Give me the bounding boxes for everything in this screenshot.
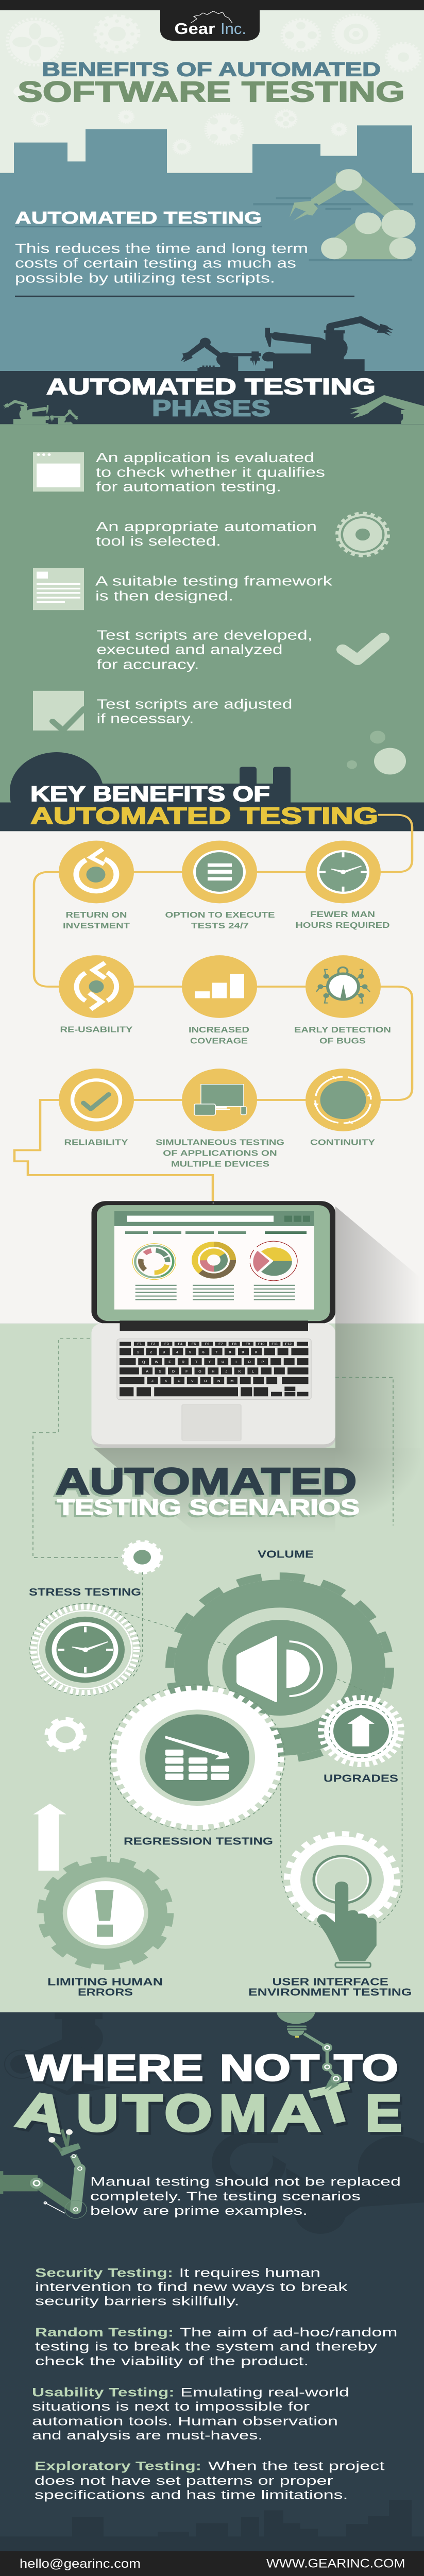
label: CONTINUITY <box>310 1138 375 1147</box>
keyboard keys: 9 <box>242 1351 244 1354</box>
phase 5 text: Test scripts are adjusted <box>97 697 293 712</box>
keyboard keys: F7 <box>218 1343 223 1346</box>
label: TESTS 24/7 <box>191 921 249 930</box>
keyboard keys: L <box>252 1370 255 1374</box>
intro paragraph: possible by utilizing test scripts. <box>15 271 275 286</box>
label: SIMULTANEOUS TESTING <box>156 1138 284 1147</box>
robot arm lower left <box>0 2129 87 2218</box>
keyboard keys: M <box>230 1380 234 1383</box>
keyboard keys: 6 <box>202 1351 205 1354</box>
phase 1 text: An application is evaluated <box>96 450 314 465</box>
heading: phases: AUTOMATED TESTING <box>46 375 376 399</box>
scenario: regression gear <box>110 1685 285 1831</box>
laptop screen <box>114 1211 314 1310</box>
scenario: user interface gear <box>287 1834 397 1968</box>
keyboard keys: R <box>182 1361 184 1364</box>
clock hands <box>58 1627 113 1673</box>
phase 4 text <box>97 628 313 672</box>
speaker icon <box>236 1636 323 1702</box>
scenario labels bottom: USER INTERFACE <box>273 1976 388 1988</box>
phases panel background <box>0 424 424 803</box>
heading: testing scenarios: TESTING SCENARIOS <box>57 1495 360 1519</box>
label: HOURS REQUIRED <box>296 920 390 929</box>
title <box>18 58 405 108</box>
screen chart 3 <box>240 1233 307 1289</box>
intro paragraph: This reduces the time and long term <box>15 241 308 256</box>
heading: automate: A <box>274 2087 324 2145</box>
bottom skyline <box>0 2500 424 2551</box>
item: usability testing: automation tools. Human observation <box>32 2414 338 2428</box>
light robot arm illustration <box>253 169 416 261</box>
phase 5 text <box>97 697 293 726</box>
intro text: Manual testing should not be replaced <box>90 2175 401 2189</box>
small green robot left <box>3 400 78 424</box>
label: FEWER MAN <box>310 910 375 919</box>
keyboard keys: F2 <box>151 1343 156 1346</box>
keyboard keys: 2 <box>150 1351 152 1354</box>
heading: phases: PHASES <box>152 396 270 421</box>
scenario labels bottom: ERRORS <box>78 1986 133 1998</box>
regression label: REGRESSION TESTING <box>124 1835 273 1847</box>
intro text: below are prime examples. <box>90 2204 308 2218</box>
screen chart 1 <box>128 1240 180 1283</box>
label: OF BUGS <box>319 1036 366 1045</box>
heading: where not to: WHERE <box>28 2049 206 2091</box>
dashed scenario connectors <box>30 1572 402 1928</box>
benefit: reliability <box>59 1069 134 1147</box>
item: exploratory testing: Exploratory Testing: <box>35 2459 201 2473</box>
heading: automate: T <box>125 2087 165 2145</box>
phase 2 text: An appropriate automation <box>96 519 317 534</box>
item: security testing: Security Testing: <box>35 2266 173 2280</box>
heading: where not to: NOT <box>219 2047 319 2089</box>
keyboard keys: F10 <box>258 1343 265 1346</box>
heading: automate: T <box>306 2072 362 2137</box>
item: usability testing <box>32 2385 349 2442</box>
item: random testing: The aim of ad-hoc/random <box>180 2325 398 2339</box>
keyboard keys: O <box>248 1361 251 1364</box>
scenario labels top: VOLUME <box>258 1548 314 1560</box>
keyboard keys: 1 <box>137 1351 139 1354</box>
keyboard keys: U <box>222 1361 224 1364</box>
keyboard keys: W <box>155 1361 159 1364</box>
heading: where not to: TO <box>334 2047 398 2089</box>
item: usability testing: Usability Testing: <box>32 2385 174 2399</box>
label <box>156 1138 284 1168</box>
heading: testing scenarios: TESTING SCENARIOS <box>55 1497 358 1521</box>
heading: automate: A <box>271 2084 321 2142</box>
heading: automate: U <box>79 2087 121 2145</box>
heading: automate: U <box>76 2084 118 2142</box>
label <box>165 910 275 930</box>
item: exploratory testing: does not have set patterns or proper <box>35 2473 333 2487</box>
logo tab: Inc. <box>221 20 246 38</box>
where not to automate panel <box>0 2012 424 2551</box>
heading: phases <box>46 375 376 421</box>
benefit: fewer man hours <box>296 841 390 929</box>
label: RETURN ON <box>66 910 127 919</box>
keyboard keys: E <box>168 1361 171 1364</box>
item: random testing: check the viability of the product. <box>35 2354 309 2368</box>
keyboard keys: H <box>212 1370 214 1374</box>
keyboard keys: P <box>261 1361 264 1364</box>
heading: key benefits: AUTOMATED TESTING <box>30 803 378 829</box>
item: security testing: security barriers skillfully. <box>35 2294 239 2308</box>
heading: testing scenarios: AUTOMATED <box>53 1463 354 1504</box>
keyboard keys: A <box>146 1370 148 1374</box>
screen chart 2 <box>195 1244 233 1276</box>
heading: automate: M <box>219 2084 267 2142</box>
phase 1 text <box>96 450 325 495</box>
heading: where not to <box>26 2047 400 2091</box>
background gears <box>7 14 420 154</box>
benefit: early detection of bugs <box>294 955 391 1045</box>
exclamation mark <box>95 1890 113 1937</box>
label: RE-USABILITY <box>60 1025 133 1034</box>
keyboard keys <box>120 1342 308 1396</box>
keyboard keys: F3 <box>164 1343 169 1346</box>
heading: automate: A <box>11 2079 72 2144</box>
heading: testing scenarios: AUTOMATED <box>56 1461 357 1502</box>
phase 1 text: to check whether it qualifies <box>96 465 325 480</box>
footer <box>0 2551 424 2576</box>
phase 4 text: Test scripts are developed, <box>97 628 313 643</box>
heading: automate: O <box>164 2084 212 2142</box>
label <box>189 1025 249 1045</box>
intro paragraph: costs of certain testing as much as <box>15 256 296 271</box>
logo wordmark: Gear <box>175 20 215 38</box>
robot arm upper right <box>277 2012 342 2091</box>
keyboard keys: F11 <box>272 1343 278 1346</box>
intro paragraph <box>15 241 308 286</box>
phase 2 text <box>96 519 317 549</box>
phase 4 icon: check <box>343 638 383 660</box>
keyboard keys: D <box>172 1370 175 1374</box>
heading: automate <box>11 2072 404 2147</box>
heading: where not to: TO <box>336 2049 400 2091</box>
keyboard keys: 8 <box>229 1351 231 1354</box>
keyboard keys: 5 <box>189 1351 191 1354</box>
intro text <box>90 2175 401 2218</box>
top bar <box>0 0 424 10</box>
teal section with city skyline <box>0 125 424 371</box>
dashed connectors from laptop <box>33 1338 393 1557</box>
footer website: WWW.GEARINC.COM <box>266 2556 405 2570</box>
upgrades label: UPGRADES <box>324 1773 398 1784</box>
keyboard keys: F8 <box>232 1343 236 1346</box>
bubbles <box>347 731 406 774</box>
phase 3 icon: document <box>33 568 84 610</box>
item: random testing <box>35 2325 398 2368</box>
yellow connector line <box>14 815 412 1202</box>
label: MULTIPLE DEVICES <box>171 1159 269 1168</box>
keyboard keys: 7 <box>215 1351 217 1354</box>
dark robot silhouette <box>181 316 394 371</box>
label: OF APPLICATIONS ON <box>163 1148 277 1158</box>
phase 5 text: if necessary. <box>97 711 194 726</box>
laptop long shadow <box>93 1207 424 1546</box>
footer email: hello@gearinc.com <box>20 2556 141 2571</box>
benefits panel background <box>0 831 424 1324</box>
item: exploratory testing: When the test project <box>208 2459 385 2473</box>
label: OPTION TO EXECUTE <box>165 910 275 919</box>
heading: automate: T <box>123 2084 162 2142</box>
keyboard keys: S <box>159 1370 162 1374</box>
keyboard keys: V <box>191 1380 194 1383</box>
item: exploratory testing: specifications and has time limitations. <box>35 2488 348 2502</box>
scenario labels bottom: LIMITING HUMAN <box>47 1976 163 1988</box>
heading: key benefits: KEY BENEFITS OF <box>30 782 270 806</box>
keyboard keys: F1 <box>138 1343 142 1346</box>
large white arrow <box>33 1804 66 1871</box>
phase 5 icon: checkbox <box>33 691 84 731</box>
laptop lid <box>92 1201 335 1324</box>
scenario: stress gear <box>33 1607 137 1692</box>
laptop base <box>92 1320 335 1448</box>
label <box>294 1025 391 1045</box>
laptop <box>92 1201 335 1448</box>
keyboard keys: F <box>185 1370 188 1374</box>
keyboard keys: F5 <box>192 1343 196 1346</box>
item: usability testing: Emulating real-world <box>180 2385 349 2399</box>
heading: where not to: NOT <box>222 2049 321 2091</box>
keyboard keys: Z <box>151 1380 154 1383</box>
keyboard keys: 3 <box>163 1351 165 1354</box>
heading: automate: M <box>222 2087 269 2145</box>
phase 1 text: for automation testing. <box>96 480 281 495</box>
heading: automate: E <box>368 2087 404 2145</box>
label: INCREASED <box>189 1025 249 1035</box>
heading: automate: O <box>167 2087 215 2145</box>
item: usability testing: situations is next to impossible for <box>32 2399 310 2414</box>
logo tab <box>160 10 260 41</box>
scenarios panel background <box>0 1324 424 2012</box>
title: BENEFITS OF AUTOMATED <box>42 58 381 80</box>
benefit: simultaneous testing <box>156 1069 284 1168</box>
small white gear <box>46 1719 84 1751</box>
phase 4 text: executed and analyzed <box>97 642 283 657</box>
item: security testing: intervention to find new ways to break <box>35 2280 348 2294</box>
scenario labels bottom <box>47 1976 412 1998</box>
heading: automate: A <box>14 2082 75 2147</box>
benefit: return on investment <box>59 841 134 930</box>
item: random testing: testing is to break the system and thereby <box>35 2340 378 2353</box>
screen text lines <box>135 1285 295 1300</box>
title: SOFTWARE TESTING <box>18 76 405 108</box>
scenario: volume gear <box>170 1576 389 1759</box>
phase 3 text: is then designed. <box>95 589 233 604</box>
scenario labels top <box>29 1548 314 1598</box>
heading: testing scenarios <box>53 1461 360 1521</box>
phase 3 text <box>95 574 333 604</box>
keyboard keys: N <box>217 1380 220 1383</box>
phase 1 icon: window <box>33 452 84 492</box>
keyboard keys: T <box>195 1361 198 1364</box>
keyboard keys: X <box>164 1380 167 1383</box>
keyboard keys: F4 <box>178 1343 182 1346</box>
keyboard keys: C <box>178 1380 180 1383</box>
keyboard keys: K <box>238 1370 241 1374</box>
keyboard keys: G <box>198 1370 201 1374</box>
keyboard keys: Q <box>142 1361 145 1364</box>
heading: automated testing: AUTOMATED TESTING <box>15 208 262 227</box>
item: security testing <box>35 2266 348 2308</box>
item: exploratory testing <box>35 2459 385 2502</box>
logo gear outline <box>191 11 232 23</box>
label <box>63 910 130 930</box>
label: COVERAGE <box>190 1036 248 1045</box>
background robot shadows <box>5 2013 424 2234</box>
dashed link across volume gear <box>337 1679 366 1691</box>
benefit: increased coverage <box>182 955 257 1045</box>
keyboard keys: I <box>235 1361 236 1364</box>
scenario labels bottom: ENVIRONMENT TESTING <box>248 1986 412 1998</box>
label: RELIABILITY <box>64 1138 128 1147</box>
benefit: re-usability <box>59 955 134 1034</box>
phase 2 text: tool is selected. <box>96 534 221 549</box>
phase 2 icon: gear <box>337 513 388 556</box>
scenario: limiting human errors gear <box>41 1859 171 1967</box>
scenario labels top: STRESS TESTING <box>29 1586 141 1598</box>
factory silhouette behind benefits heading <box>0 752 424 831</box>
keyboard keys: B <box>204 1380 207 1383</box>
keyboard keys: F12 <box>285 1343 292 1346</box>
keyboard keys: F6 <box>205 1343 210 1346</box>
green robot arm right <box>349 395 424 424</box>
item: random testing: Random Testing: <box>35 2325 174 2339</box>
item: security testing: It requires human <box>179 2266 320 2280</box>
keyboard keys: Y <box>208 1361 211 1364</box>
benefit: continuity <box>306 1069 381 1147</box>
label <box>296 910 390 929</box>
label: EARLY DETECTION <box>294 1025 391 1035</box>
descending chart icon <box>165 1736 230 1780</box>
small gear connector <box>123 1541 161 1573</box>
benefit: option to execute 24/7 <box>165 841 275 930</box>
pointing hand <box>317 1882 377 1968</box>
keyboard keys: J <box>225 1370 228 1374</box>
keyboard keys: 4 <box>176 1351 178 1354</box>
heading: key benefits <box>30 782 378 829</box>
phase 4 text: for accuracy. <box>97 657 199 672</box>
keyboard keys: 0 <box>255 1351 257 1354</box>
phases header band <box>0 371 424 424</box>
heading: where not to: WHERE <box>26 2047 203 2089</box>
intro text: completely. The testing scenarios <box>90 2189 361 2203</box>
scenario: upgrades gear <box>321 1698 401 1765</box>
heading: automate: T <box>309 2075 365 2140</box>
phase 3 text: A suitable testing framework <box>95 574 333 589</box>
keyboard keys: F9 <box>246 1343 250 1346</box>
header background <box>0 10 424 173</box>
item: usability testing: and analysis are must-haves. <box>32 2428 263 2442</box>
heading: automate: E <box>365 2084 402 2142</box>
label: INVESTMENT <box>63 921 130 930</box>
